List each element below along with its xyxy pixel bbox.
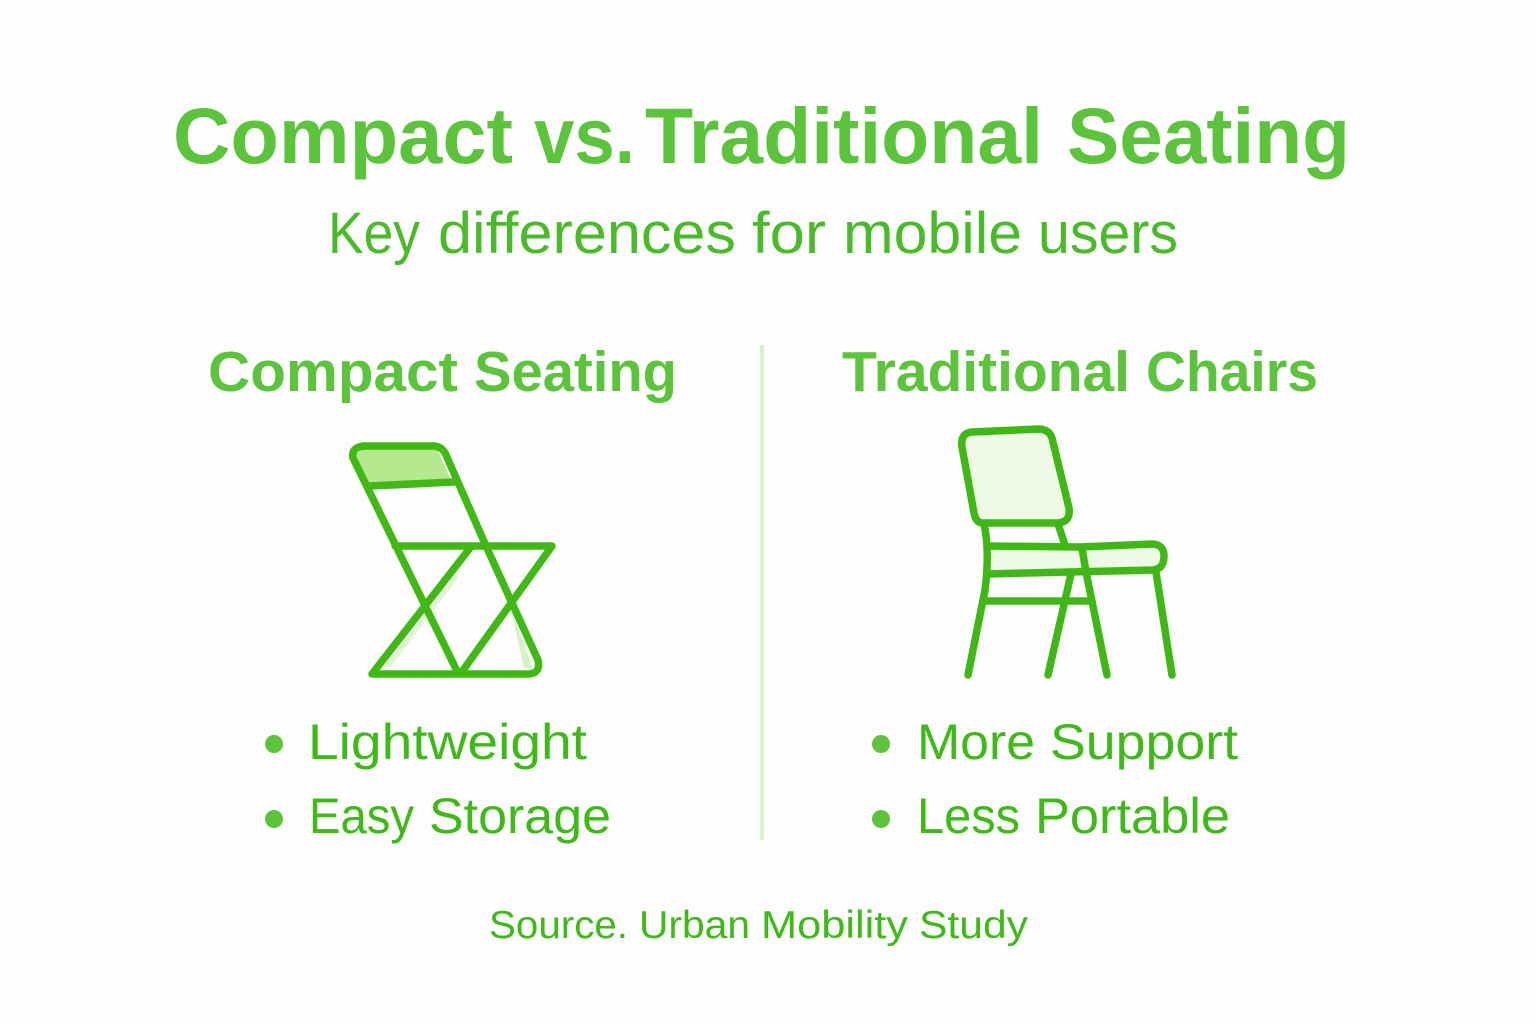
text: less portable: Portable (1035, 788, 1230, 844)
bullet: less portable (872, 810, 890, 828)
text: easy storage: Storage (429, 788, 611, 844)
text: less portable: Less (917, 788, 1020, 844)
title: Traditional (645, 91, 1043, 180)
source note: Study (919, 904, 1029, 947)
panel: traditional chairs (842, 340, 1318, 675)
divider (760, 345, 764, 840)
source note: Mobility (761, 904, 909, 947)
heading: traditional chairs: Chairs (1146, 340, 1318, 404)
title: Seating (1067, 91, 1350, 180)
source note: Urban (639, 904, 750, 947)
text: lightweight: Lightweight (308, 714, 587, 770)
text: more support: More (917, 714, 1035, 770)
subtitle: mobile (843, 201, 1022, 266)
subtitle: for (752, 201, 826, 266)
icon: traditional chair (962, 429, 1172, 675)
text: more support: Support (1050, 714, 1238, 770)
icon: folding chair (353, 446, 552, 674)
bullet: easy storage (265, 810, 283, 828)
bullet: more support (872, 735, 890, 753)
text: easy storage: Easy (309, 788, 414, 844)
subtitle: Key (328, 201, 420, 266)
panel: compact seating (208, 340, 677, 674)
subtitle: differences (438, 201, 736, 266)
list: traditional chairs (872, 714, 1238, 844)
list: compact seating (265, 714, 611, 844)
subtitle: users (1038, 201, 1178, 266)
bullet: lightweight (265, 735, 283, 753)
heading: traditional chairs: Traditional (842, 340, 1130, 404)
heading: compact seating: Seating (474, 340, 677, 404)
heading: compact seating: Compact (208, 340, 458, 404)
title: Compact (173, 91, 513, 180)
title: vs. (534, 91, 635, 180)
source note: Source. (489, 904, 628, 947)
